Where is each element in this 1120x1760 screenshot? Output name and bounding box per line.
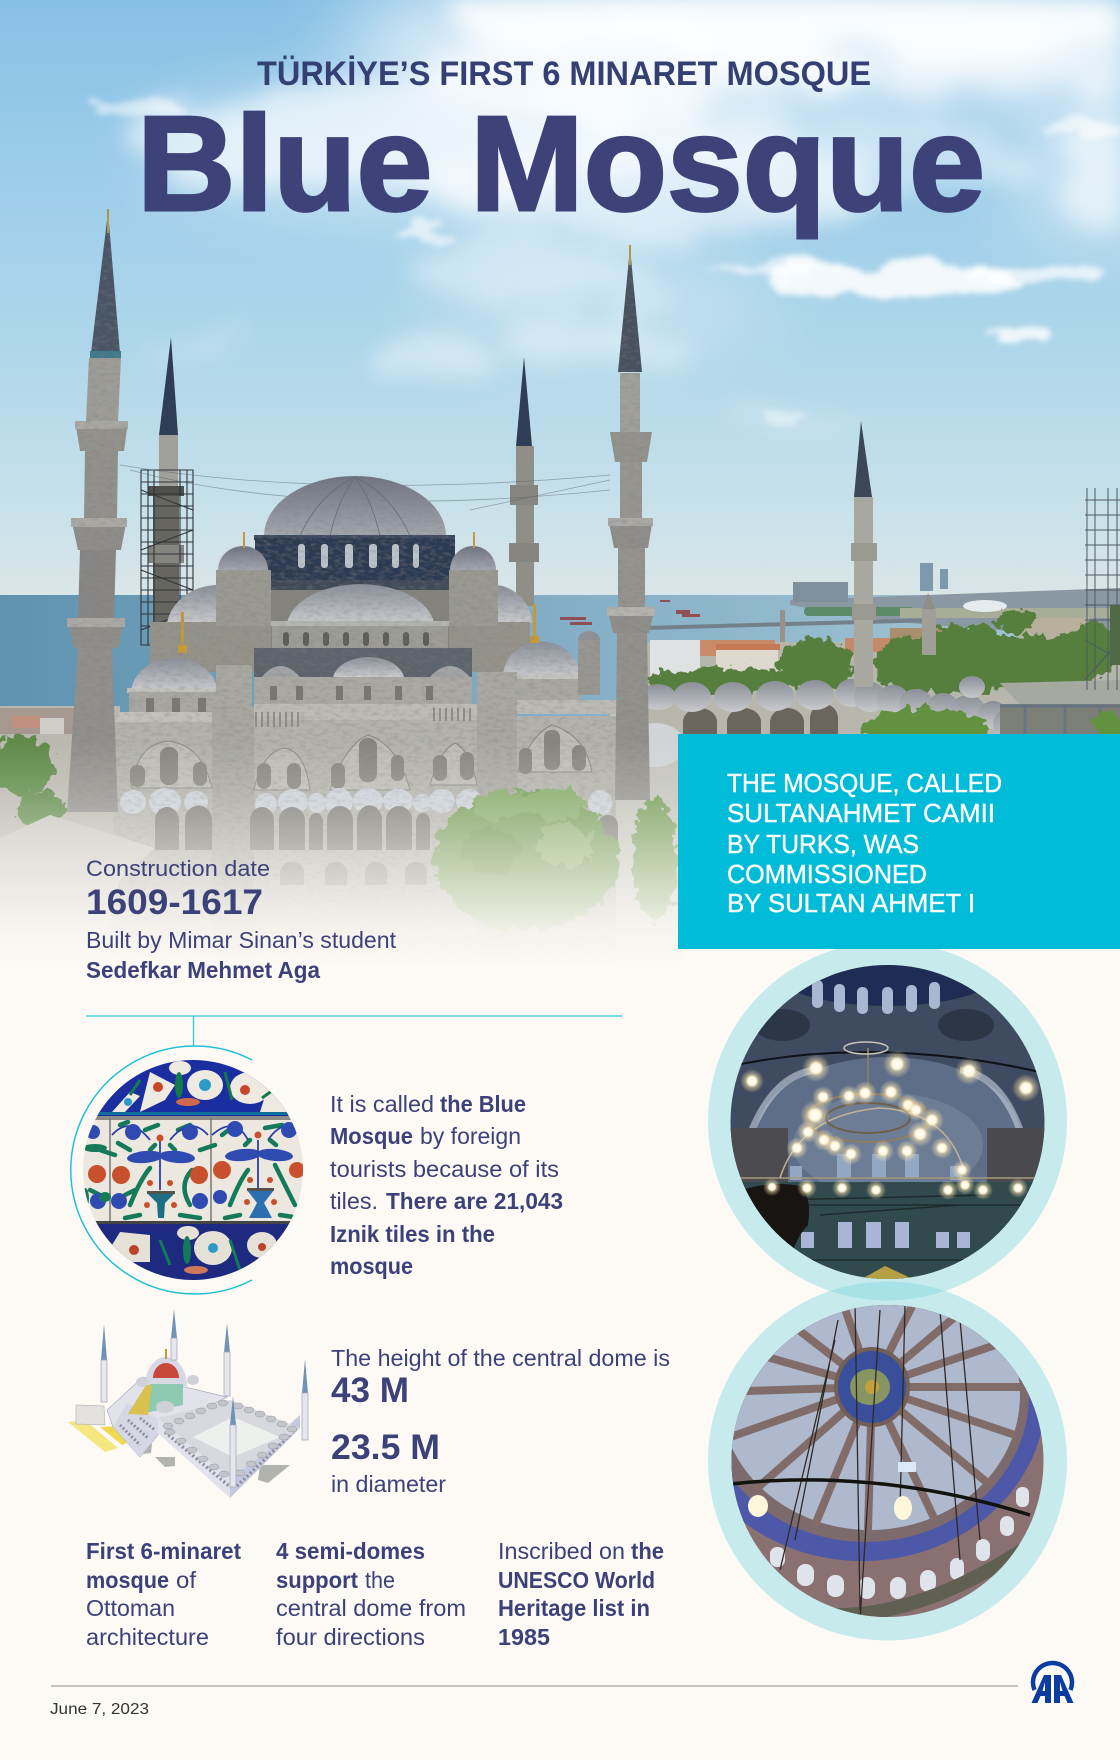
central medallion — [834, 1347, 910, 1427]
minarets — [101, 1309, 308, 1487]
courtyard block — [158, 1400, 300, 1498]
text block: tiles: by foreign — [420, 1123, 521, 1149]
main stone walls — [113, 665, 618, 966]
prayer hall — [107, 1377, 227, 1457]
text block: dome height: The height of the central dome is — [331, 1345, 670, 1371]
fact: first 6-minaret mosque: of — [176, 1567, 197, 1593]
text block: tiles: mosque — [330, 1253, 413, 1279]
teal callout: BY SULTAN AHMET I — [727, 888, 975, 918]
blue stems — [112, 1126, 303, 1190]
text block: tiles: tourists because of its — [330, 1156, 559, 1182]
semi dome — [271, 584, 449, 650]
text block: tiles — [330, 1091, 563, 1279]
fact: first 6-minaret mosque: mosque — [86, 1567, 169, 1593]
blue tulips — [86, 1121, 297, 1209]
white fade over the photo — [0, 740, 1120, 990]
fact: UNESCO: 1985 — [498, 1624, 550, 1650]
text block: construction date: 1609-1617 — [86, 883, 263, 922]
foreground trees — [433, 789, 677, 930]
lower blue band — [96, 1221, 290, 1224]
front right minaret — [607, 245, 655, 800]
date: June 7, 2023 — [50, 1701, 149, 1718]
rear half domes — [150, 585, 532, 672]
back minarets and scaffold — [141, 337, 539, 650]
fact: semi-domes: support — [276, 1567, 358, 1593]
teal callout: THE MOSQUE, CALLED — [727, 768, 1002, 798]
courtyard domes — [163, 1400, 297, 1477]
photo: chandelier interior — [730, 965, 1044, 1279]
text block: construction date: Construction date — [86, 856, 270, 881]
text block: tiles: Mosque — [330, 1123, 413, 1149]
red carnations — [88, 1132, 305, 1208]
teal callout: COMMISSIONED — [727, 859, 927, 889]
text block: tiles: It is called — [330, 1091, 434, 1117]
front left minaret — [67, 209, 128, 812]
fact: UNESCO — [498, 1538, 664, 1650]
corner turrets — [216, 532, 498, 626]
fact: first 6-minaret mosque: Ottoman — [86, 1595, 175, 1621]
upper blue band — [97, 1060, 289, 1116]
fact: semi-domes: central dome from — [276, 1595, 466, 1621]
sky with clouds — [0, 0, 1120, 600]
fact: first 6-minaret mosque: First 6-minaret — [86, 1538, 241, 1564]
fact: first 6-minaret mosque — [86, 1538, 241, 1650]
central dome — [254, 476, 455, 590]
text block: tiles: Iznik tiles in the — [330, 1221, 495, 1247]
main title: Blue Mosque — [137, 88, 985, 239]
cutaway dome — [128, 1349, 199, 1415]
stained glass windows — [801, 1222, 970, 1248]
photo: Blue Mosque and Istanbul skyline — [0, 0, 1120, 990]
wires — [120, 465, 610, 510]
chandelier lights — [740, 1050, 1040, 1200]
tile circle — [71, 1046, 305, 1294]
green stems — [90, 1122, 300, 1218]
teal callout: BY TURKS, WAS — [727, 829, 919, 859]
far minaret right — [851, 421, 936, 687]
right shore: roofs, trees and courtyard domes — [625, 488, 1120, 767]
mosque building — [113, 476, 618, 966]
fact: first 6-minaret mosque: architecture — [86, 1624, 209, 1650]
fact: semi-domes — [276, 1538, 466, 1650]
text block: construction date — [86, 856, 397, 983]
text block: tiles: the Blue — [440, 1091, 526, 1117]
upper windows — [812, 980, 940, 1014]
lower left dome with gold finial — [127, 612, 222, 720]
illustration: isometric mosque plan — [68, 1309, 308, 1498]
fact: UNESCO: UNESCO World — [498, 1567, 655, 1593]
icon: AA logo — [1032, 1663, 1074, 1703]
dark silhouette — [745, 1184, 809, 1248]
lower right dome with gold finial — [503, 604, 600, 703]
second tier roof — [254, 648, 472, 704]
fact: UNESCO: the — [631, 1538, 664, 1564]
subtitle: TÜRKİYE’S FIRST 6 MINARET MOSQUE — [257, 55, 871, 93]
text block: tiles: There are 21,043 — [386, 1188, 563, 1214]
dome windows — [770, 1487, 1029, 1599]
fact: semi-domes: four directions — [276, 1624, 425, 1650]
text block: dome height — [331, 1345, 670, 1497]
fact: semi-domes: the — [365, 1567, 395, 1593]
teal callout — [678, 734, 1120, 949]
ring: interior photo frames — [708, 942, 1067, 1640]
vases — [147, 1188, 274, 1218]
text block: construction date: Built by Mimar Sinan’s student — [86, 927, 397, 953]
fact: UNESCO: Heritage list in — [498, 1595, 650, 1621]
text block: tiles: tiles. — [330, 1188, 378, 1214]
fact: semi-domes: 4 semi-domes — [276, 1538, 425, 1564]
text block: dome height: 23.5 M — [331, 1428, 440, 1467]
photo: dome ceiling — [732, 1305, 1044, 1617]
tile arc — [71, 1046, 252, 1294]
ground and platforms — [68, 1405, 290, 1483]
left foreground: trees and porch roof — [0, 735, 155, 966]
connector line — [86, 1016, 622, 1046]
text block: construction date: Sedefkar Mehmet Aga — [86, 957, 320, 983]
text block: dome height: 43 M — [331, 1371, 409, 1410]
hanging cables — [780, 1300, 980, 1620]
lamps — [748, 1462, 916, 1520]
teal callout: SULTANAHMET CAMII — [727, 798, 995, 828]
footer rule — [51, 1685, 1018, 1687]
sea and far shoreline — [0, 563, 1120, 972]
fact: UNESCO: Inscribed on — [498, 1538, 625, 1564]
dome ribs — [732, 1306, 1020, 1530]
text block: dome height: in diameter — [331, 1471, 446, 1497]
middle panel — [95, 1116, 291, 1120]
